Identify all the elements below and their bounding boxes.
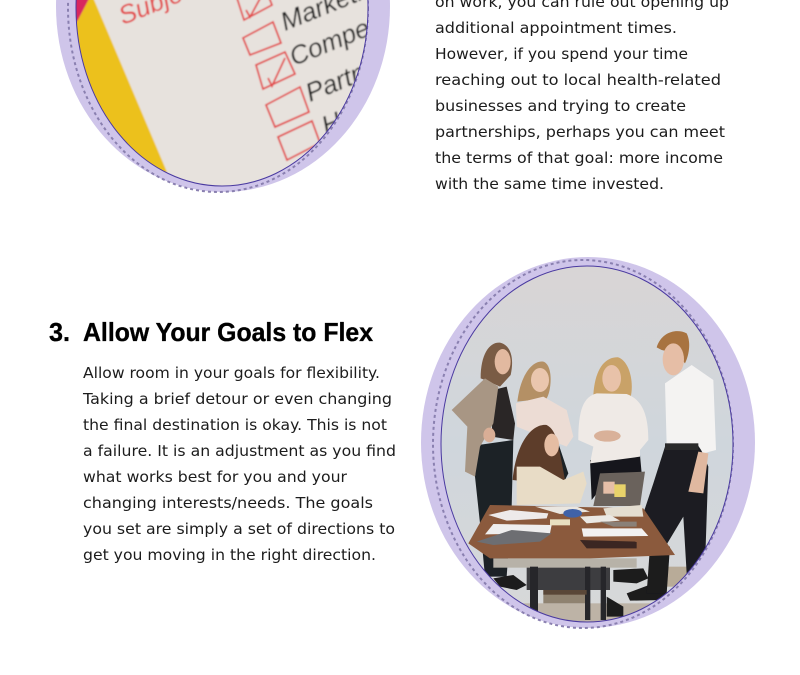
table items [488,510,548,521]
photo outline [441,266,733,622]
photo: checklist on paper: Partners [301,43,403,108]
laptop [593,472,645,506]
text block: goal 3 body: Allow room in your goals for flexibility. [83,364,380,382]
text block: goal 2 continued: partnerships, perhaps you can meet [435,123,725,141]
dashed ring [68,0,368,192]
text block: goal 3 body: a failure. It is an adjustment as you find [83,442,396,460]
person 4 [590,455,642,500]
text block: goal 3 body: what works best for you and your [83,468,348,486]
photo outline [76,0,368,186]
photo frame: team meeting [421,257,755,628]
text block: goal 2 continued [435,0,729,193]
under-table legs and chair [527,567,610,590]
text block: goal 2 continued: additional appointment times. [435,19,677,37]
text block: goal 2 continued: businesses and trying to create [435,97,686,115]
text block: goal 3 body: get you moving in the right direction. [83,546,376,564]
text block: goal 2 continued: However, if you spend your time [435,45,688,63]
text block: goal 3 body [82,364,396,564]
person 1 [475,440,513,577]
text block: goal 3 body: you set are simply a set of directions to [83,520,395,538]
text block: goal 2 continued: reaching out to local health-related [435,71,721,89]
person 5 [643,443,708,573]
dashed ring [433,260,733,628]
lilac backing oval [421,257,755,628]
text block: goal 3 body: changing interests/needs. The goals [83,494,373,512]
heading: 3. Allow Your Goals to Flex: Allow Your Goals to Flex [83,317,374,347]
text block: goal 2 continued: the terms of that goal: more income [435,149,723,167]
person 2 [517,362,551,402]
table legs [530,567,538,612]
table [493,558,637,568]
heading: 3. Allow Your Goals to Flex: 3. [49,317,70,347]
person 3 seated [513,425,565,483]
photo: checklist on paper: Health [317,85,398,141]
photo: checklist on paper [76,0,368,186]
lilac backing oval [56,0,390,192]
text block: goal 2 continued: with the same time invested. [435,175,664,193]
photo frame: checklist [56,0,390,193]
photo: team around a table [442,266,732,622]
text block: goal 3 body: Taking a brief detour or even changing [82,390,392,408]
text block: goal 3 body: the final destination is okay. This is not [83,416,387,434]
